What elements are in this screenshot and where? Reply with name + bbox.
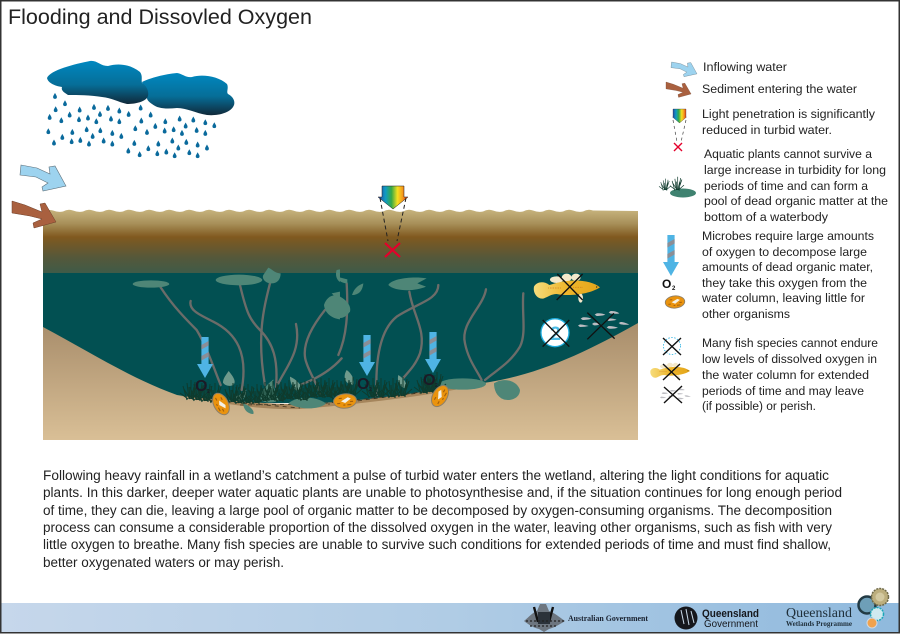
body text: [43, 468, 842, 570]
legend: microbes: they take this oxygen from the: [702, 276, 867, 290]
oxygen arrows: O: [357, 376, 369, 393]
oxygen arrows: 2: [207, 389, 210, 395]
body text: Following heavy rainfall in a wetland’s catchment a pulse of turbid water enters the wetland, altering the light conditions for aquatic: [43, 468, 829, 483]
body text: of time, they can die, leaving a large pool of organic matter to be decomposed by oxygen-consuming organisms. The decomposition: [43, 503, 832, 518]
icon: oxygen arrow and microbe: [662, 235, 685, 309]
logo: Queensland Government: [674, 606, 759, 630]
body text: better oxygenated waters or may perish.: [43, 555, 284, 570]
legend: light penetration: [672, 107, 876, 151]
icon: rain clouds: [47, 61, 234, 115]
icon: crossed oxygen, fish and school: [650, 338, 691, 403]
body text: plants. In this darker, deeper water aquatic plants are unable to photosynthesise and, if the situation continues for long enough period: [43, 485, 842, 500]
legend: aquatic plants: Aquatic plants cannot survive a: [704, 147, 872, 161]
light penetration arrow: [378, 186, 408, 257]
legend: fish: [650, 336, 878, 413]
legend: inflowing water: Inflowing water: [703, 60, 787, 74]
plant stems (left): [161, 283, 342, 393]
legend: microbes: Microbes require large amounts: [702, 229, 874, 243]
legend: aquatic plants: pool of dead organic matter at the: [704, 194, 888, 208]
legend: fish: periods of time and may leave: [702, 384, 864, 398]
oxygen symbol crossed out: [541, 319, 569, 347]
oxygen arrows: 2: [435, 383, 438, 389]
title: Flooding and Dissovled Oxygen: [8, 6, 312, 29]
logo: Queensland Government: Government: [704, 619, 758, 630]
legend: sediment: Sediment entering the water: [702, 82, 857, 96]
oxygen symbol crossed out: 2: [550, 324, 561, 345]
logo: Queensland Government: Queensland: [702, 608, 759, 620]
legend: microbes: of oxygen to decompose large: [702, 245, 867, 259]
lily pads and leaves (left): [133, 268, 340, 414]
logo: Queensland Wetlands Programme: Wetlands Programme: [786, 619, 853, 628]
legend: fish: (if possible) or perish.: [702, 399, 816, 413]
legend: light penetration: Light penetration is significantly: [702, 107, 876, 121]
legend: microbes: water column, leaving little for: [701, 291, 865, 305]
legend: fish: low levels of dissolved oxygen in: [702, 352, 877, 366]
arrow: inflowing water: [20, 165, 66, 191]
logo: Australian Government: [524, 604, 648, 632]
oxygen arrows: O: [423, 372, 435, 389]
oxygen arrows: [195, 332, 441, 395]
fish with cross: [534, 274, 600, 303]
organic matter layer: [180, 386, 470, 409]
icon: oxygen arrow and microbe: O: [662, 277, 671, 291]
arrow: sediment: [12, 201, 56, 228]
sandy bed: [43, 323, 638, 440]
footer band: [1, 603, 899, 632]
legend: aquatic plants: periods of time and can form a: [704, 179, 868, 193]
body text: process can consume a considerable proportion of the dissolved oxygen in the water, leaving other organisms, such as fish with very: [43, 520, 832, 535]
logo: Queensland Wetlands Programme: Queensland: [786, 606, 852, 621]
rain drops: [46, 93, 216, 158]
oxygen arrows: 2: [369, 387, 372, 393]
deep teal water: [43, 273, 638, 403]
icon: dead plants: [659, 177, 696, 198]
legend: light penetration: reduced in turbid water.: [702, 123, 832, 137]
turbid water layer: [43, 210, 638, 273]
legend: aquatic plants: large increase in turbidity for long: [704, 163, 886, 177]
lily pads and leaves (right): [337, 277, 520, 400]
icon: mini light arrow: [672, 109, 686, 151]
logo: Australian Government: Australian Government: [568, 613, 648, 623]
icon: oxygen arrow and microbe: 2: [672, 286, 676, 292]
logo: Queensland Wetlands Programme: [786, 588, 888, 628]
plant stems (right): [338, 283, 524, 397]
fish school crossed out: [578, 311, 629, 339]
legend: aquatic plants: bottom of a waterbody: [704, 210, 829, 224]
legend: inflowing water: [671, 60, 787, 77]
icon: brown arrow: [666, 82, 691, 97]
legend: aquatic plants: [659, 147, 888, 224]
microbes: [209, 382, 452, 418]
oxygen arrows: O: [195, 378, 207, 395]
legend: fish: Many fish species cannot endure: [702, 336, 878, 350]
legend: fish: the water column for extended: [702, 368, 869, 382]
legend: microbes: amounts of dead organic mater,: [702, 260, 873, 274]
legend: microbes: other organisms: [702, 307, 790, 321]
body text: little oxygen to breathe. Many fish species are unable to survive such conditions for extended periods of time and must find shallow,: [43, 537, 831, 552]
icon: blue arrow: [671, 62, 697, 77]
panel: wetland cross-section: [43, 210, 638, 440]
legend: microbes: [662, 229, 874, 321]
bottom grasses: [180, 372, 446, 404]
submerged plants group: [133, 268, 524, 418]
